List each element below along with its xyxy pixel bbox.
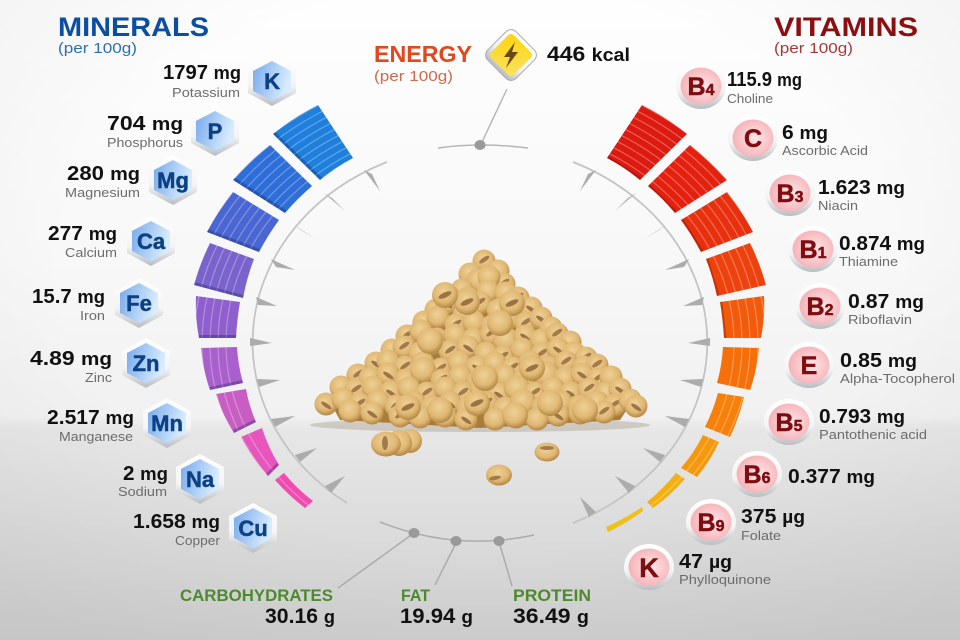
mineral: magnesium: 280 mg	[67, 163, 140, 185]
heading: vitamins: (per 100g)	[774, 40, 853, 57]
mineral: sodium: Sodium	[118, 484, 167, 499]
bar: alpha-tocopherol	[717, 347, 759, 390]
mineral: potassium	[163, 56, 296, 106]
vitamin: B9	[686, 499, 805, 545]
label: protein	[513, 587, 591, 628]
panel: minerals list	[30, 56, 296, 553]
mineral: copper	[133, 503, 277, 553]
bar: riboflavin	[720, 296, 764, 338]
bar: folate	[647, 473, 685, 508]
mineral: copper: Cu	[238, 516, 268, 541]
vitamin: K: Phylloquinone	[679, 572, 771, 587]
mineral: sodium	[118, 454, 224, 504]
mineral: potassium: Potassium	[172, 85, 240, 100]
vitamin: B9: 375 µg	[741, 506, 805, 528]
vitamin: E: E	[801, 352, 817, 380]
mineral: iron	[32, 278, 163, 328]
vitamin: B4	[676, 63, 802, 109]
bar: ascorbic acid	[648, 145, 727, 213]
vitamin: B2: B2	[807, 293, 834, 321]
label: fat: 19.94 g	[400, 605, 473, 628]
illustration: loose beans	[371, 429, 560, 486]
mineral: zinc: Zn	[133, 351, 159, 376]
connector: energy	[438, 89, 528, 150]
vitamin: B5: Pantothenic acid	[819, 427, 927, 442]
bar: copper	[275, 473, 313, 508]
mineral: calcium	[48, 216, 175, 266]
vitamin: B4: Choline	[727, 91, 773, 106]
vitamin: K: 47 µg	[679, 551, 732, 573]
icon: lightning diamond	[483, 27, 539, 83]
mineral: magnesium: Magnesium	[65, 185, 140, 200]
label: protein: 36.49 g	[513, 605, 589, 628]
bar: thiamine	[706, 243, 766, 296]
vitamin: E: Alpha-Tocopherol	[840, 371, 955, 386]
vitamin: B2: 0.87 mg	[848, 291, 924, 313]
vitamin: C: 6 mg	[782, 122, 828, 144]
mineral: phosphorus: 704 mg	[107, 113, 183, 135]
mineral: potassium: K	[264, 69, 280, 94]
heading: minerals: MINERALS	[58, 12, 209, 42]
mineral: sodium: 2 mg	[123, 463, 168, 485]
label: protein: PROTEIN	[513, 587, 591, 605]
bar: pantothenic acid	[705, 393, 744, 437]
mineral: phosphorus: Phosphorus	[107, 135, 184, 150]
bar: choline	[607, 105, 687, 180]
mineral: copper: Copper	[175, 533, 221, 548]
label: fat	[400, 587, 473, 628]
vitamin: B2: Riboflavin	[848, 312, 912, 327]
mineral: copper: 1.658 mg	[133, 511, 220, 533]
vitamin: B1: 0.874 mg	[839, 233, 925, 255]
mineral: sodium: Na	[186, 467, 215, 492]
vitamin: C	[728, 115, 868, 161]
mineral: calcium: Calcium	[65, 245, 117, 260]
bar: magnesium	[207, 192, 279, 252]
vitamin: B1: B1	[800, 236, 827, 264]
bar: zinc	[201, 347, 243, 390]
vitamin: B5: 0.793 mg	[819, 406, 905, 428]
vitamin: B6: B6	[744, 461, 771, 489]
panel: vitamins list	[624, 63, 955, 590]
mineral: calcium: Ca	[137, 229, 166, 254]
heading: minerals	[58, 12, 209, 57]
vitamin: B9: Folate	[741, 528, 781, 543]
panel: energy	[374, 27, 630, 150]
vitamin: B2	[795, 283, 924, 329]
vitamin: B3: B3	[777, 180, 804, 208]
bar: sodium	[241, 428, 279, 476]
bar: calcium	[194, 243, 254, 298]
panel: energy: (per 100g)	[374, 68, 453, 85]
vitamin: B5	[764, 399, 927, 445]
vitamin: B3: 1.623 mg	[818, 177, 905, 199]
bar: iron	[196, 296, 240, 338]
mineral: iron: Iron	[80, 308, 105, 323]
illustration: soybean pile	[310, 250, 650, 432]
mineral: iron: 15.7 mg	[32, 286, 105, 308]
mineral: manganese	[47, 398, 191, 448]
mineral: magnesium: Mg	[157, 168, 189, 193]
chart: vitamin bars	[606, 105, 766, 532]
vitamin: C: C	[744, 125, 762, 153]
vitamin: B1	[788, 226, 925, 272]
bar: vitamin B6	[681, 435, 719, 477]
bar: phylloquinone	[606, 507, 643, 532]
panel: energy: 446 kcal	[547, 43, 630, 66]
panel: energy: ENERGY	[374, 41, 472, 67]
vitamin: K	[624, 544, 771, 590]
vitamin: B4: B4	[688, 73, 715, 101]
connector: macronutrients	[338, 522, 534, 588]
mineral: zinc: 4.89 mg	[30, 348, 112, 370]
vitamin: B3: Niacin	[818, 198, 858, 213]
heading: vitamins	[774, 12, 918, 57]
mineral: potassium: 1797 mg	[163, 62, 241, 84]
mineral: magnesium	[65, 155, 197, 205]
mineral: manganese: 2.517 mg	[47, 407, 134, 429]
bar: manganese	[216, 389, 256, 433]
vitamin: B3	[765, 170, 905, 216]
mineral: manganese: Manganese	[59, 429, 133, 444]
vitamin: B5: B5	[776, 409, 803, 437]
vitamin: B6: 0.377 mg	[788, 466, 875, 488]
mineral: phosphorus	[107, 106, 239, 156]
heading: vitamins: VITAMINS	[774, 12, 918, 42]
mineral: iron: Fe	[126, 291, 152, 316]
label: carbohydrates	[180, 587, 335, 628]
mineral: phosphorus: P	[208, 119, 222, 144]
vitamin: B6	[732, 451, 875, 497]
bar: niacin	[681, 192, 753, 252]
chart: mineral bars	[194, 105, 353, 508]
vitamin: B4: 115.9 mg	[727, 69, 802, 91]
vitamin: B9: B9	[698, 509, 725, 537]
label: fat: FAT	[401, 587, 430, 605]
label: carbohydrates: CARBOHYDRATES	[180, 587, 333, 605]
bar: potassium	[273, 105, 353, 180]
vitamin: E: 0.85 mg	[840, 350, 917, 372]
mineral: manganese: Mn	[151, 411, 183, 436]
heading: minerals: (per 100g)	[58, 40, 137, 57]
bar: phosphorus	[233, 145, 312, 213]
mineral: calcium: 277 mg	[48, 223, 117, 245]
vitamin: E	[784, 342, 955, 388]
label: carbohydrates: 30.16 g	[265, 605, 335, 628]
mineral: zinc: Zinc	[85, 370, 113, 385]
vitamin: B1: Thiamine	[839, 254, 898, 269]
vitamin: K: K	[639, 553, 659, 583]
vitamin: C: Ascorbic Acid	[782, 143, 868, 158]
gauge arcs with ticks	[250, 162, 710, 523]
mineral: zinc	[30, 338, 170, 388]
